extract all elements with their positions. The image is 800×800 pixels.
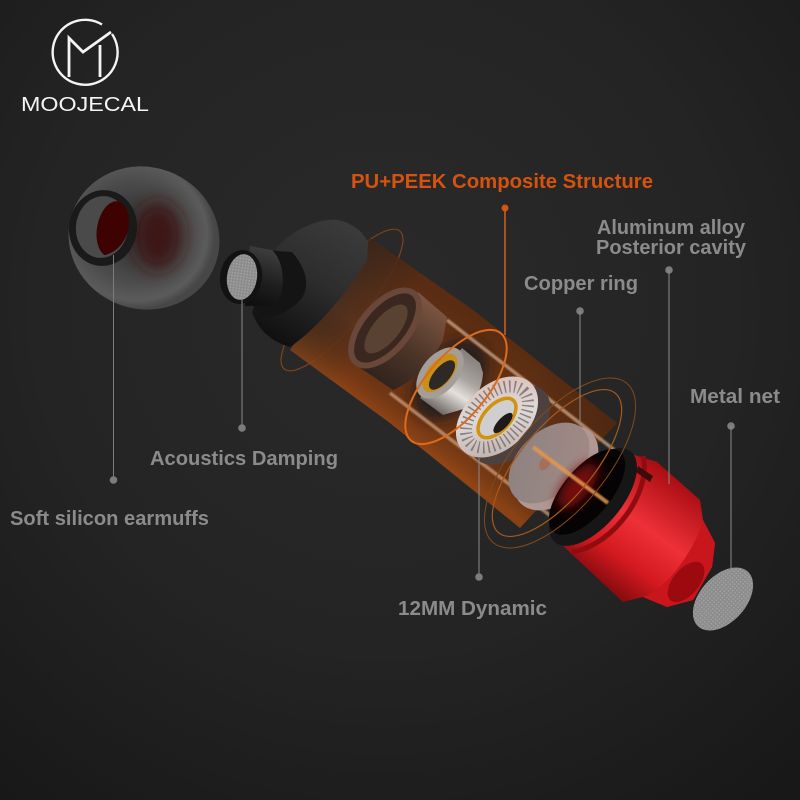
callout: metal net: Metal net bbox=[690, 386, 780, 408]
brown inner holder bbox=[338, 279, 447, 390]
callout: aluminum alloy posterior cavity bbox=[596, 217, 747, 484]
callout: 12MM dynamic: 12MM Dynamic bbox=[398, 598, 547, 620]
callout: acoustics damping: Acoustics Damping bbox=[150, 448, 338, 470]
silver ring component bbox=[407, 338, 483, 415]
callout: aluminum alloy posterior cavity: Aluminum alloy bbox=[597, 217, 746, 239]
PU+PEEK composite tube bbox=[290, 238, 617, 528]
highlight stripes on tube bbox=[390, 320, 617, 533]
callout: copper ring bbox=[524, 273, 638, 430]
orange outline rings bbox=[388, 314, 662, 572]
callout: aluminum alloy posterior cavity: Posterior cavity bbox=[596, 237, 747, 259]
callout: soft silicon earmuffs bbox=[10, 255, 209, 530]
copper ring plate bbox=[493, 407, 615, 527]
callout: PU+PEEK composite structure bbox=[351, 171, 653, 335]
12mm dynamic driver bbox=[440, 361, 565, 480]
earphone body: black housing and acoustic damping mesh bbox=[216, 220, 368, 347]
red aluminum alloy posterior cavity bbox=[555, 453, 715, 609]
callout: copper ring: Copper ring bbox=[524, 273, 638, 295]
rear orange ring around housing bbox=[265, 215, 419, 385]
callout: 12MM dynamic bbox=[398, 458, 547, 620]
callout: soft silicon earmuffs: Soft silicon earmuffs bbox=[10, 508, 209, 530]
black socket with orange light beam bbox=[533, 433, 653, 561]
brand logo bbox=[21, 20, 149, 116]
callout: metal net bbox=[690, 386, 780, 570]
callout: acoustics damping bbox=[150, 298, 338, 470]
infographic canvas bbox=[10, 18, 780, 630]
earbud: soft silicon earmuff bbox=[68, 166, 220, 310]
metal net disc bbox=[681, 556, 765, 642]
brand logo: MOOJECAL bbox=[21, 94, 149, 116]
callout: PU+PEEK composite structure: PU+PEEK Composite Structure bbox=[351, 171, 653, 193]
